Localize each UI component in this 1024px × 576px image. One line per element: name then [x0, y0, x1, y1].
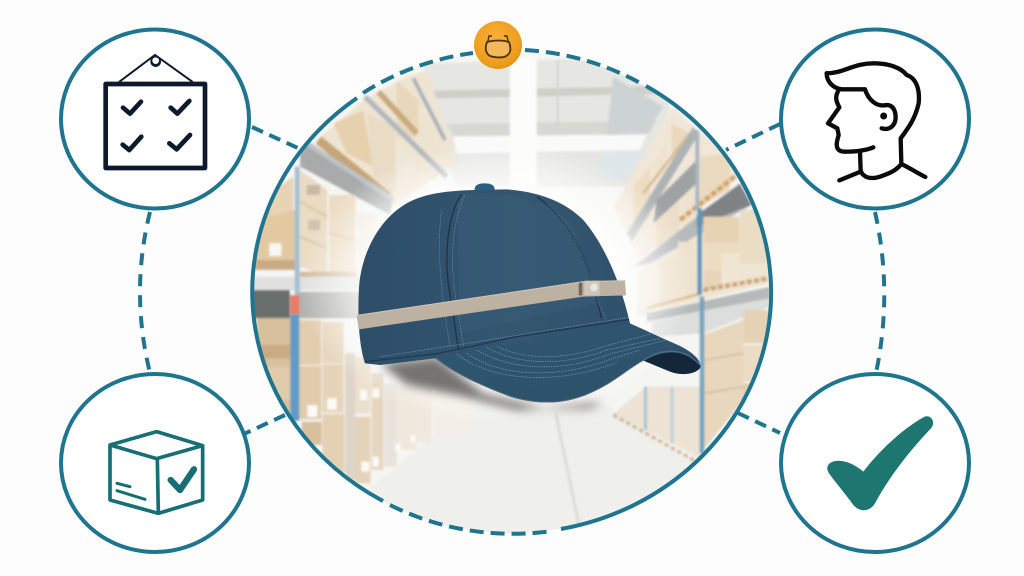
ceiling: [423, 57, 670, 187]
right lower boxes: [703, 320, 743, 450]
connector: left vertical: [140, 212, 150, 373]
connector: top-left: [252, 127, 300, 149]
icon: package with check: [110, 432, 203, 513]
left upper beams: [300, 143, 393, 215]
floor: [363, 397, 700, 540]
main ring: bottom dashes: [390, 505, 552, 534]
circle: box with check: [61, 374, 249, 552]
left shelf band: [250, 277, 360, 290]
panel: warehouse photo: [250, 47, 773, 540]
connector: bottom-left: [244, 415, 285, 434]
cap: [357, 183, 701, 403]
left pole: [295, 167, 300, 295]
right pole: [695, 130, 699, 210]
right beams: [627, 127, 698, 242]
sweatband seam: [365, 319, 630, 362]
circle: large check mark: [781, 374, 969, 552]
strap buckle: [584, 281, 600, 295]
cap button: [475, 183, 495, 191]
icon: hanging checklist board: [106, 55, 205, 168]
badge: orange cap icon: [474, 21, 522, 69]
seams: [447, 194, 462, 350]
left mid boxes: [253, 210, 295, 260]
circle: checklist board: [61, 30, 249, 208]
icon: head profile: [827, 63, 925, 180]
main ring: solid right arc: [561, 86, 771, 529]
cap brim: [456, 335, 700, 402]
main ring: top dashes right: [525, 50, 642, 84]
connector: right vertical: [875, 212, 884, 373]
connector: bottom-right: [738, 413, 780, 433]
circle: person profile: [781, 30, 969, 208]
brim stitching: [497, 334, 650, 357]
left lower boxes: [257, 318, 292, 425]
cap crown and brim: [358, 189, 701, 403]
main ring: top dashes left: [363, 53, 473, 93]
connector: top-right: [726, 124, 780, 150]
main ring: solid left arc: [252, 98, 383, 501]
wood strips: [680, 175, 737, 220]
hat shadow: [380, 357, 603, 410]
lit panel: [457, 193, 597, 333]
left upper shelf boxes: [317, 70, 457, 207]
right mid boxes: [638, 234, 769, 316]
brim underside: [643, 353, 701, 374]
right upper boxes: [613, 107, 740, 260]
cap strap: [357, 281, 626, 329]
icon: check mark: [827, 416, 933, 510]
white glow behind hat: [306, 158, 686, 399]
